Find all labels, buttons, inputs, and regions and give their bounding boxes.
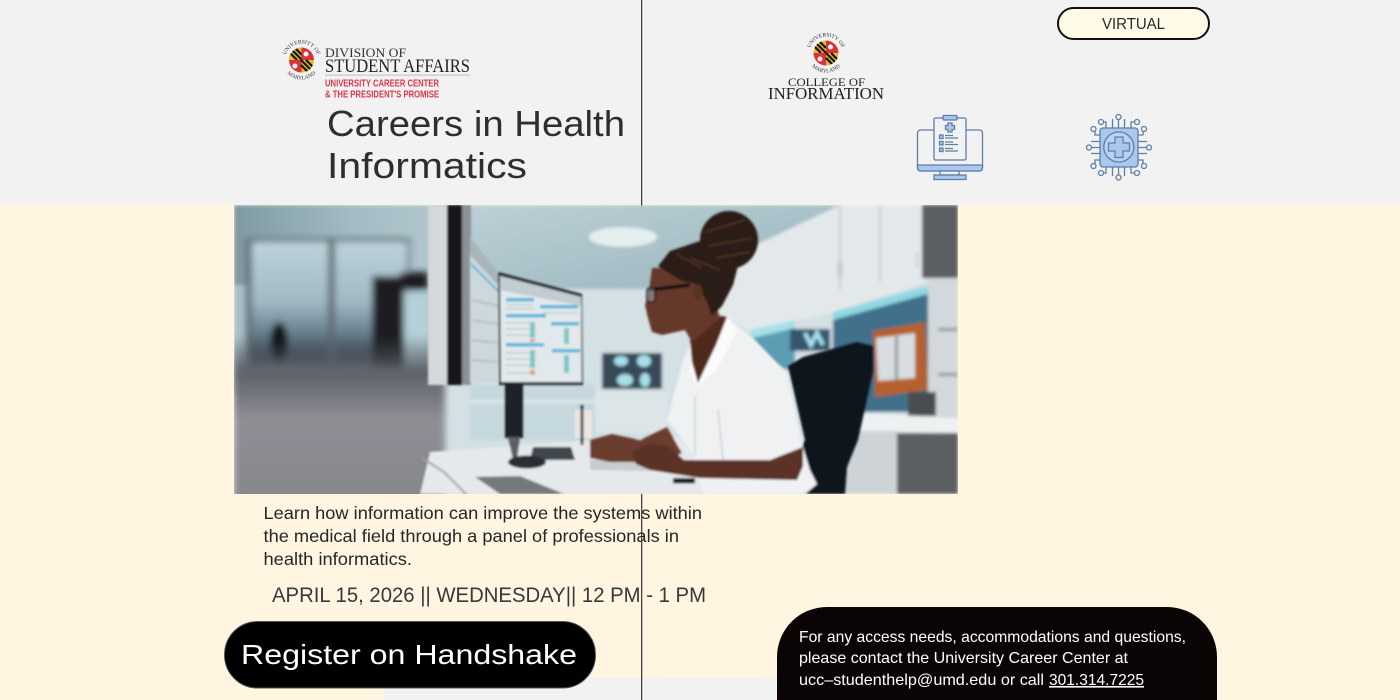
panel: contact information: For any access needs, accommodations and questions,	[799, 629, 1186, 646]
arms and hands	[590, 427, 682, 462]
counter and lower cabinets	[855, 413, 958, 433]
icon: University of Maryland seal small	[806, 32, 845, 73]
icon: monitor with medical clipboard	[918, 116, 982, 180]
panel: contact information: 301.314.7225	[1049, 672, 1144, 689]
logo: Division of Student Affairs	[282, 40, 470, 100]
title: Informatics	[327, 145, 527, 186]
description text	[264, 503, 702, 569]
logo: College of Information	[768, 32, 884, 103]
blurred window and foreground	[234, 238, 445, 505]
icon: University of Maryland seal small: UNIVERSITY OF	[806, 32, 845, 47]
icon: University of Maryland seal	[282, 40, 320, 80]
icon: medical microchip	[1086, 114, 1152, 180]
button: register on handshake: Register on Handshake	[241, 639, 577, 670]
monitors and desk	[420, 205, 873, 498]
chair	[786, 340, 875, 494]
badge: virtual	[1058, 8, 1209, 39]
college wordmark	[768, 75, 884, 103]
logo wordmark: DIVISION OF	[325, 46, 406, 60]
button: register on handshake	[224, 622, 596, 688]
logo wordmark: UNIVERSITY CAREER CENTER	[325, 78, 440, 90]
icon: University of Maryland seal small: MARYLAND	[812, 64, 840, 73]
badge: virtual: VIRTUAL	[1102, 16, 1165, 33]
cabinets	[720, 205, 926, 331]
logo wordmark: STUDENT AFFAIRS	[325, 56, 470, 77]
title: Careers in Health	[327, 103, 625, 144]
wall screens	[790, 329, 830, 351]
panel: contact information	[777, 607, 1217, 700]
college wordmark: COLLEGE OF	[788, 75, 865, 89]
title	[327, 103, 625, 186]
panel: contact information: please contact the University Career Center at	[799, 650, 1129, 667]
panel: contact information: ucc–studenthelp@umd.edu or call	[799, 672, 1044, 689]
event date and time: APRIL 15, 2026 || WEDNESDAY|| 12 PM - 1 PM	[272, 583, 706, 607]
description text: the medical field through a panel of professionals in	[264, 526, 679, 546]
icon: University of Maryland seal: UNIVERSITY OF	[282, 40, 320, 54]
college wordmark: INFORMATION	[768, 84, 884, 103]
shirt	[667, 317, 817, 494]
description text: Learn how information can improve the systems within	[264, 503, 702, 523]
logo wordmark: & THE PRESIDENT'S PROMISE	[325, 90, 439, 100]
logo wordmark	[325, 46, 470, 100]
neck and head	[690, 316, 727, 383]
description text: health informatics.	[264, 549, 412, 569]
icon: University of Maryland seal: MARYLAND	[287, 70, 315, 80]
hair and bun	[658, 240, 740, 316]
photo: woman at computer monitors in medical office	[234, 205, 958, 505]
